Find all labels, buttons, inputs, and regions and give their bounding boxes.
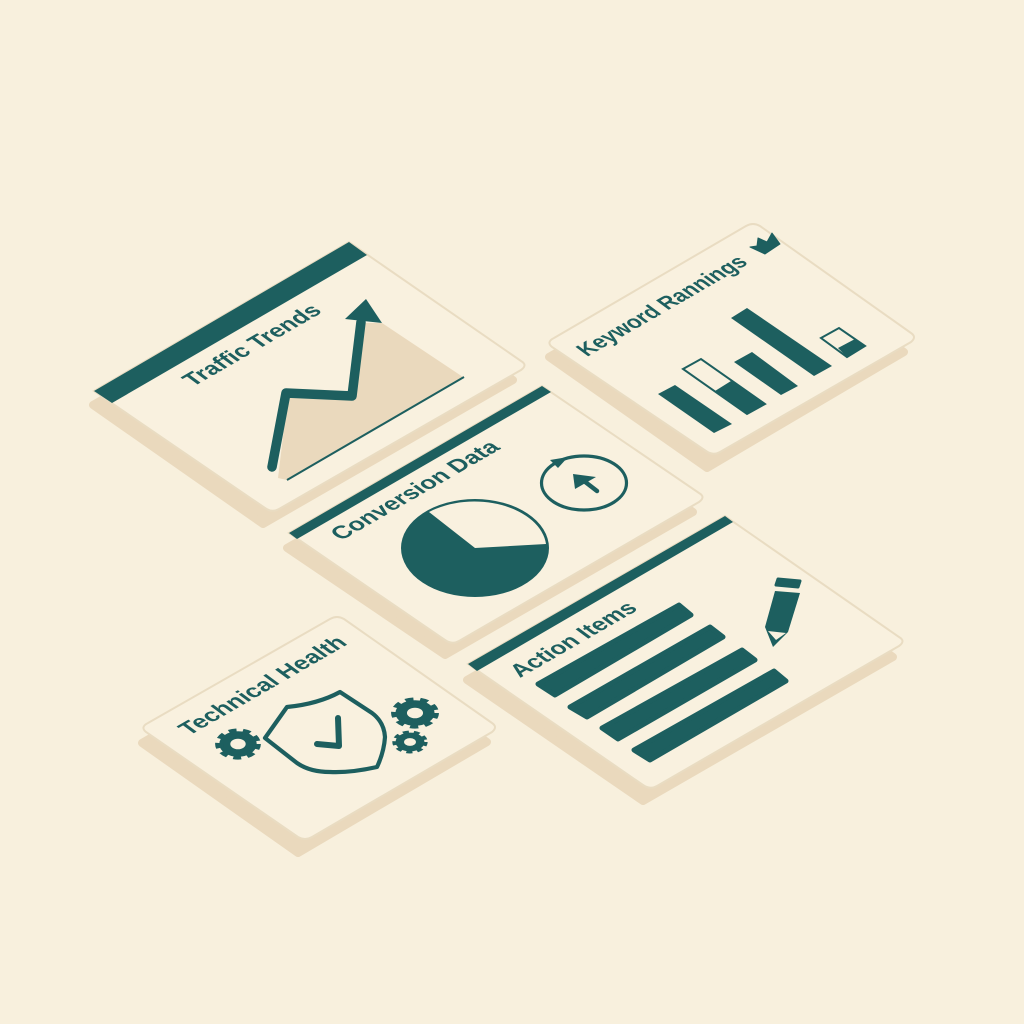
panel card: conversion data — [289, 386, 702, 643]
pie chart: conversion — [401, 499, 549, 597]
panel card: traffic trends — [94, 242, 524, 511]
heading: technical health: Technical Health — [173, 632, 352, 739]
icon: cursor in circle — [542, 456, 626, 510]
heading: traffic trends: Traffic Trends — [177, 300, 327, 390]
header bar: action items — [468, 516, 733, 671]
panel shadow: conversion data — [287, 403, 693, 655]
panel: technical health — [142, 617, 495, 853]
header bar: traffic trends — [94, 242, 367, 403]
arrowhead: trend — [345, 299, 382, 323]
area chart: traffic — [272, 299, 464, 480]
icon: gear lower right — [395, 733, 425, 751]
panel shadow: traffic trends — [93, 262, 513, 524]
icon: gear upper right — [395, 700, 435, 726]
panel: keyword rankings — [549, 224, 914, 468]
icon: pencil — [765, 579, 800, 647]
panel card: technical health — [143, 617, 495, 839]
panel: conversion data — [287, 386, 702, 655]
icon: shield with check — [265, 692, 385, 772]
panel card: action items — [468, 516, 902, 788]
panel shadow: action items — [467, 533, 893, 801]
heading: action items: Action Items — [504, 597, 643, 681]
panel: traffic trends — [93, 242, 524, 524]
icon: gear left — [219, 731, 257, 757]
panel shadow: keyword rankings — [549, 243, 904, 468]
header bar: conversion data — [289, 386, 551, 539]
icon: crown — [750, 233, 780, 254]
heading: keyword rankings: Keyword Rannings — [571, 251, 753, 360]
panel card: keyword rankings — [549, 224, 914, 454]
panel shadow: technical health — [142, 633, 487, 853]
heading: conversion data: Conversion Data — [325, 436, 506, 544]
panel: action items — [467, 516, 902, 801]
bar chart: rankings — [658, 308, 865, 433]
task bars — [538, 605, 786, 760]
